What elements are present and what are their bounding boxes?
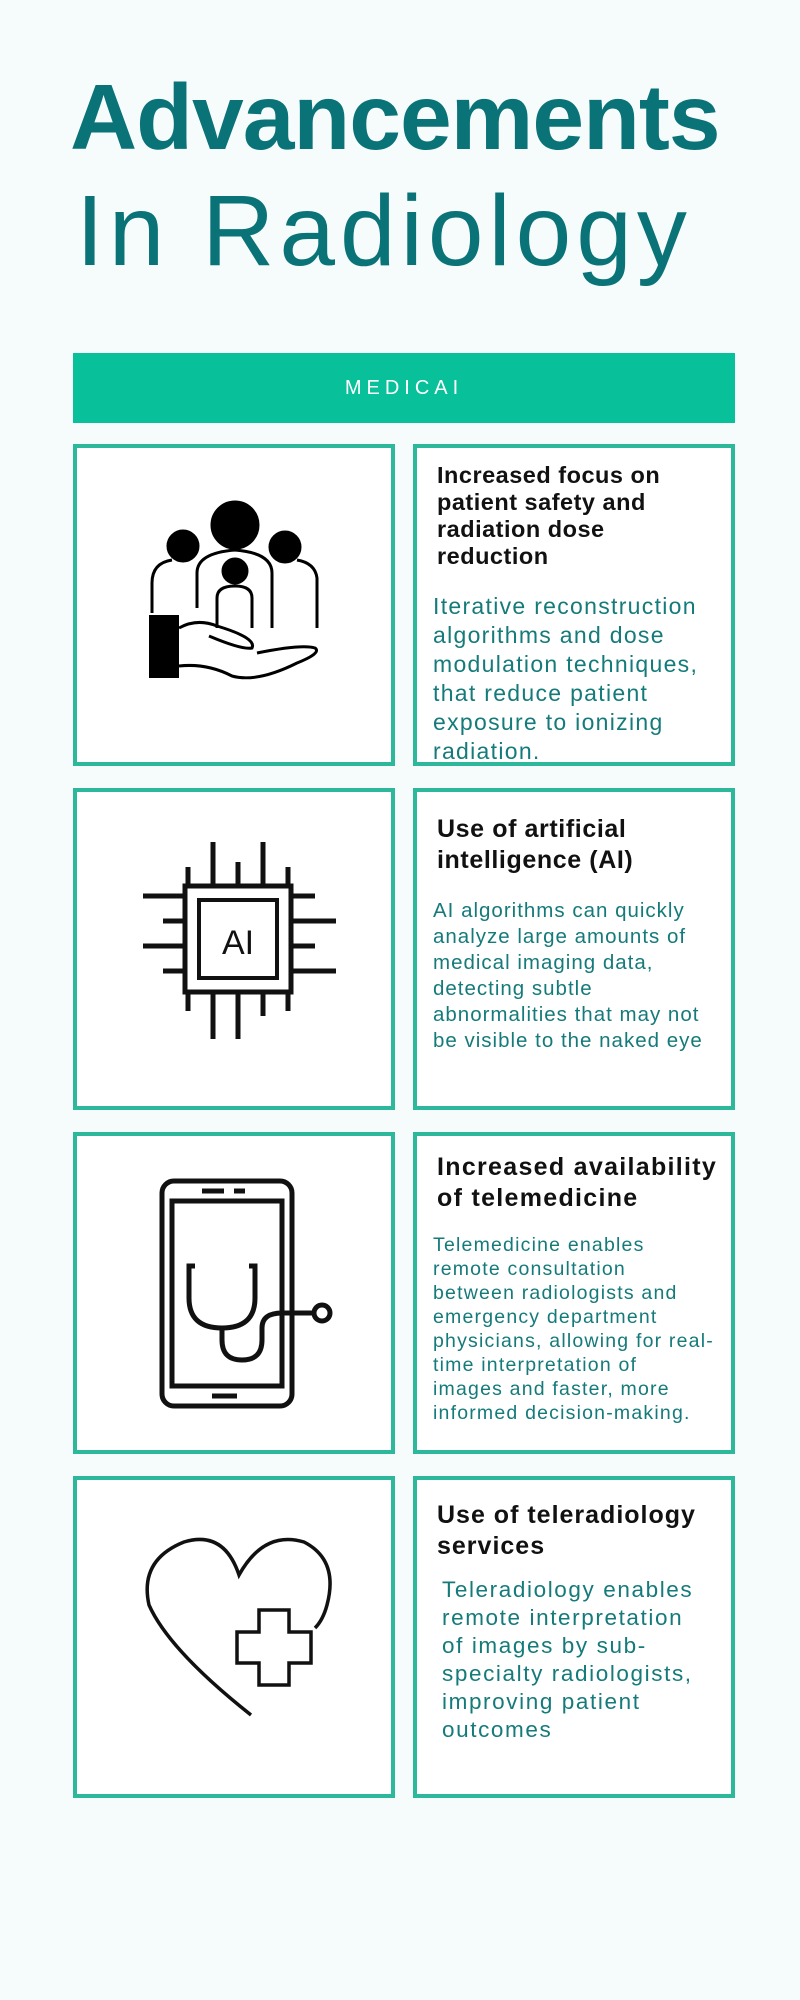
body text: time interpretation of	[433, 1354, 637, 1376]
panel: icon AI chip	[73, 788, 395, 1110]
heading: Increased focus on	[437, 462, 660, 488]
panel: telemedicine	[413, 1132, 735, 1454]
body text: AI algorithms can quickly	[433, 899, 685, 922]
body text: algorithms and dose	[433, 622, 665, 648]
body text	[442, 1577, 693, 1742]
icon: AI chip	[143, 842, 336, 1039]
title: Advancements	[70, 65, 720, 169]
body text: remote consultation	[433, 1258, 626, 1280]
heading: reduction	[437, 543, 549, 569]
body text: Telemedicine enables	[433, 1234, 645, 1256]
body text: between radiologists and	[433, 1282, 678, 1304]
body text	[433, 593, 698, 764]
body text: radiation.	[433, 738, 541, 764]
heading	[437, 1501, 696, 1560]
heading: Use of teleradiology	[437, 1501, 696, 1529]
body text: exposure to ionizing	[433, 709, 664, 735]
panel: icon phone stethoscope	[73, 1132, 395, 1454]
banner: MEDICAI: MEDICAI	[345, 377, 463, 399]
body text: analyze large amounts of	[433, 925, 686, 948]
body text: modulation techniques,	[433, 651, 698, 677]
banner: MEDICAI	[73, 353, 735, 423]
body text: that reduce patient	[433, 680, 648, 706]
title	[70, 65, 720, 287]
icon: hand holding people	[149, 500, 318, 680]
body text: specialty radiologists,	[442, 1661, 693, 1686]
body text: improving patient	[442, 1689, 641, 1714]
panel: teleradiology	[413, 1476, 735, 1798]
body text: emergency department	[433, 1306, 658, 1328]
icon: phone with stethoscope	[160, 1178, 332, 1408]
heading: of telemedicine	[437, 1184, 638, 1212]
icon: AI chip: AI	[222, 924, 254, 962]
body text: of images by sub-	[442, 1633, 647, 1658]
heading: services	[437, 1532, 545, 1560]
body text: medical imaging data,	[433, 951, 653, 974]
heading: intelligence (AI)	[437, 846, 633, 874]
body text: informed decision-making.	[433, 1402, 691, 1424]
heading	[437, 815, 633, 874]
panel: AI	[413, 788, 735, 1110]
title: In Radiology	[76, 175, 692, 287]
body text: physicians, allowing for real-	[433, 1330, 714, 1352]
icon: heart with cross	[145, 1538, 332, 1716]
body text: outcomes	[442, 1717, 552, 1742]
body text: remote interpretation	[442, 1605, 683, 1630]
body text: detecting subtle	[433, 977, 593, 1000]
body text: Teleradiology enables	[442, 1577, 693, 1602]
body text: abnormalities that may not	[433, 1003, 699, 1026]
body text: be visible to the naked eye	[433, 1029, 703, 1052]
panel: icon heart	[73, 1476, 395, 1798]
body text: Iterative reconstruction	[433, 593, 697, 619]
body text	[433, 1234, 714, 1424]
body text	[433, 899, 703, 1052]
panel: patient safety	[413, 444, 735, 766]
panel: icon people	[73, 444, 395, 766]
heading	[437, 1153, 717, 1212]
heading: Increased availability	[437, 1153, 717, 1181]
heading	[437, 462, 660, 569]
heading: Use of artificial	[437, 815, 626, 843]
heading: patient safety and	[437, 489, 646, 515]
heading: radiation dose	[437, 516, 605, 542]
body text: images and faster, more	[433, 1378, 670, 1400]
